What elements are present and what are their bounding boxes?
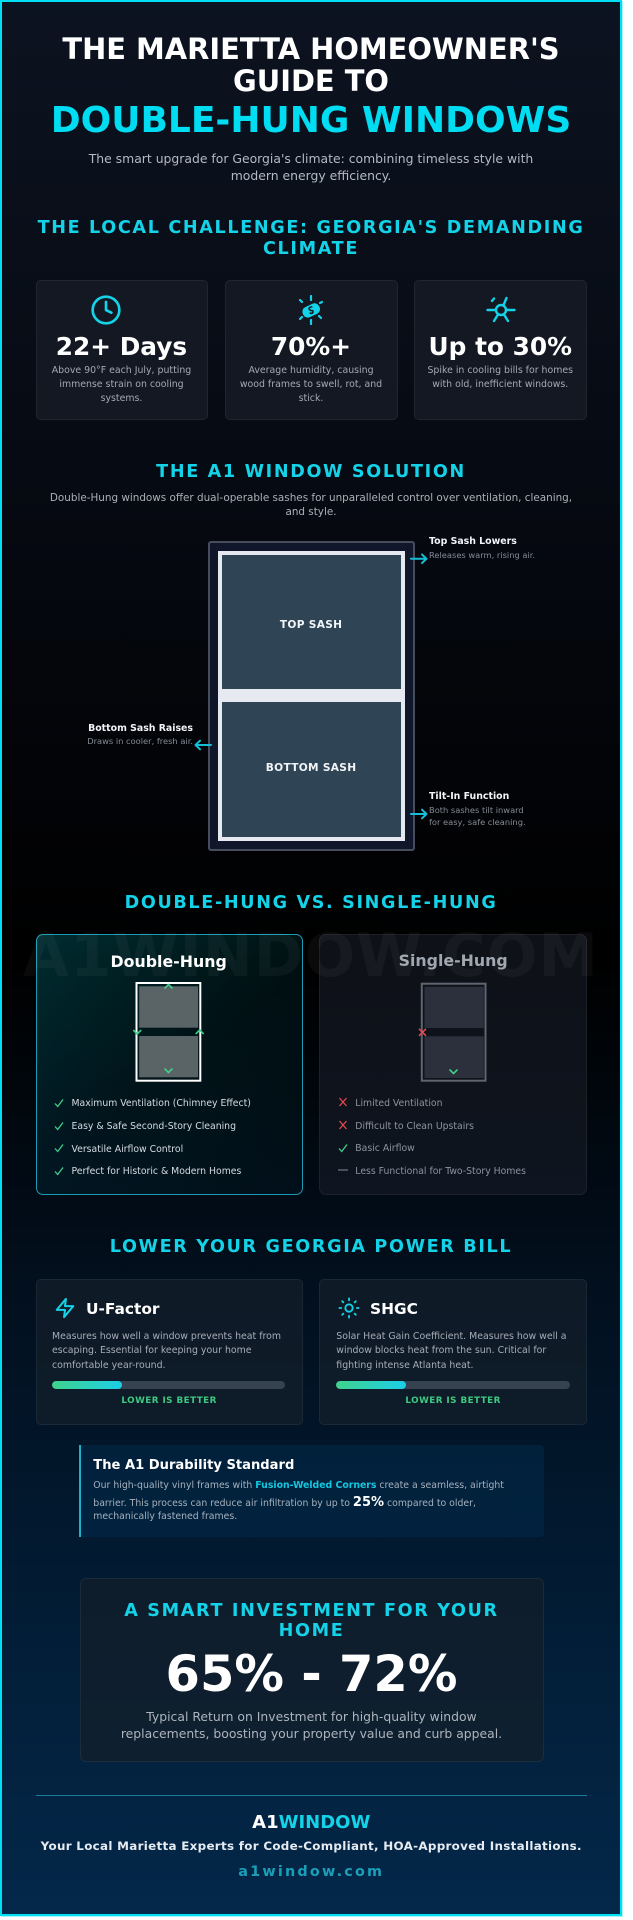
label: tilt-in function — [429, 791, 526, 827]
roi description — [121, 1709, 502, 1741]
metric description: Solar Heat Gain Coefficient. Measures how well a — [336, 1331, 567, 1342]
label: bottom sash raises — [87, 722, 193, 746]
subtitle — [88, 151, 533, 183]
metric description: comfortable year-round. — [52, 1360, 166, 1370]
arrow: bottom sash — [194, 740, 212, 750]
roi description: replacements, boosting your property value and curb appeal. — [121, 1726, 502, 1741]
callout: durability standard — [79, 1445, 544, 1537]
description: stick. — [299, 393, 323, 404]
label: top sash lowers: Top Sash Lowers — [429, 536, 517, 547]
metric description: window blocks heat from the sun. Critical for — [336, 1345, 546, 1356]
heading: local challenge — [38, 218, 584, 258]
window diagram — [208, 540, 415, 851]
panel: double-hung — [36, 934, 303, 1195]
metric description — [52, 1331, 281, 1370]
title highlight: DOUBLE-HUNG WINDOWS — [51, 100, 571, 140]
benefit list — [54, 1098, 251, 1177]
icon: single-hung window — [418, 982, 486, 1082]
roi heading — [124, 1601, 499, 1641]
heading: local challenge: THE LOCAL CHALLENGE: GEORGIA'S DEMANDING — [38, 218, 584, 238]
panel title: Single-Hung — [399, 951, 508, 970]
callout: durability standard: mechanically fastened frames. — [93, 1511, 237, 1522]
limitation list: Basic Airflow — [355, 1143, 415, 1154]
panel title: Double-Hung — [111, 952, 227, 971]
description: wood frames to swell, rot, and — [240, 379, 382, 390]
limitation list: Less Functional for Two-Story Homes — [355, 1166, 526, 1177]
subtitle: modern energy efficiency. — [231, 168, 391, 183]
metric description — [336, 1331, 567, 1370]
title: GUIDE TO — [233, 64, 389, 98]
description: Above 90°F each July, putting — [52, 364, 191, 376]
panel: u-factor — [36, 1279, 303, 1425]
label: tilt-in function: Tilt-In Function — [429, 791, 509, 802]
tagline: Your Local Marietta Experts for Code-Compliant, HOA-Approved Installations. — [41, 1838, 582, 1852]
rating note: LOWER IS BETTER — [121, 1396, 217, 1406]
description — [240, 364, 382, 404]
roi heading: HOME — [279, 1621, 344, 1641]
panel: 22+ days — [36, 280, 208, 420]
icon: sun spike — [486, 296, 516, 322]
heading: power bill: LOWER YOUR GEORGIA POWER BILL — [110, 1237, 512, 1257]
panel: 70%+ humidity — [224, 280, 398, 420]
description: Spike in cooling bills for homes — [427, 364, 573, 376]
benefit list: Easy & Safe Second-Story Cleaning — [72, 1121, 236, 1132]
arrow: top sash — [410, 554, 428, 564]
watermark: A1WINDOW.COM — [23, 922, 599, 991]
callout: durability standard: barrier. This process can reduce air infiltration by up to 25% compared to older, — [93, 1495, 476, 1510]
label: top sash lowers — [429, 536, 535, 560]
arrow: tilt-in — [410, 808, 428, 820]
label: tilt-in function: Both sashes tilt inward — [429, 804, 524, 814]
limitation list: Limited Ventilation — [355, 1098, 442, 1109]
title: THE MARIETTA HOMEOWNER'S — [62, 32, 560, 66]
top sash: TOP SASH — [280, 619, 342, 631]
icon: double-hung window — [132, 982, 204, 1082]
callout text: Our high-quality vinyl frames with Fusion-Welded Corners create a seamless, airtight — [93, 1480, 504, 1491]
stat: 70%+ — [271, 332, 351, 361]
callout title: The A1 Durability Standard — [93, 1458, 294, 1473]
subtitle: The smart upgrade for Georgia's climate: combining timeless style with — [89, 151, 533, 166]
solution intro — [50, 492, 572, 518]
bottom sash: BOTTOM SASH — [266, 762, 356, 774]
panel: single-hung — [319, 934, 587, 1195]
roi description: Typical Return on Investment for high-quality window — [146, 1709, 477, 1724]
limitation list: Difficult to Clean Upstairs — [355, 1121, 474, 1132]
metric title: SHGC — [370, 1300, 418, 1318]
top sash — [222, 555, 401, 689]
icon: humidity — [298, 294, 324, 326]
panel: shgc — [319, 1279, 587, 1425]
heading: solution: THE A1 WINDOW SOLUTION — [156, 462, 466, 482]
metric title: U-Factor — [86, 1300, 160, 1318]
icon: clock — [91, 295, 121, 325]
stat: 22+ Days — [56, 332, 187, 361]
benefit list: Versatile Airflow Control — [72, 1144, 183, 1155]
rating bar — [336, 1381, 570, 1389]
description: with old, inefficient windows. — [432, 379, 568, 390]
limitation list — [338, 1098, 526, 1177]
label: bottom sash raises: Bottom Sash Raises — [88, 722, 193, 734]
header — [51, 32, 571, 183]
stat: Up to 30% — [429, 332, 572, 361]
description: systems. — [101, 393, 142, 404]
solution intro: Double-Hung windows offer dual-operable sashes for unparalleled control over ventilation, cleaning, — [50, 492, 572, 504]
label: top sash lowers: Releases warm, rising air. — [429, 550, 535, 560]
title — [62, 32, 560, 98]
benefit list: Perfect for Historic & Modern Homes — [72, 1166, 241, 1177]
bottom sash — [222, 702, 401, 837]
logo: A1WINDOW — [252, 1812, 370, 1833]
panel: up to 30% — [414, 280, 586, 420]
footer — [36, 1795, 587, 1886]
icon: bolt — [56, 1298, 74, 1318]
metric description: escaping. Essential for keeping your home — [52, 1345, 252, 1356]
metric description: fighting intense Atlanta heat. — [336, 1360, 474, 1370]
label: bottom sash raises: Draws in cooler, fresh air. — [87, 736, 193, 746]
roi figure: 65% - 72% — [166, 1645, 457, 1703]
metric description: Measures how well a window prevents heat from — [52, 1331, 281, 1342]
solution intro: and style. — [285, 506, 337, 518]
heading: local challenge: CLIMATE — [263, 238, 359, 258]
heading: comparison: DOUBLE-HUNG VS. SINGLE-HUNG — [125, 893, 497, 913]
rating note: LOWER IS BETTER — [405, 1396, 501, 1406]
description: immense strain on cooling — [59, 379, 184, 390]
benefit list: Maximum Ventilation (Chimney Effect) — [72, 1098, 251, 1109]
panel: return on investment — [80, 1578, 544, 1762]
rating bar — [52, 1381, 285, 1389]
description — [52, 364, 191, 404]
icon: sun — [338, 1298, 360, 1318]
white frame — [218, 550, 404, 841]
description — [427, 364, 573, 390]
roi heading: A SMART INVESTMENT FOR YOUR — [124, 1601, 499, 1621]
label: tilt-in function: for easy, safe cleaning. — [429, 817, 526, 827]
website: a1window.com — [238, 1864, 384, 1880]
description: Average humidity, causing — [248, 364, 374, 376]
